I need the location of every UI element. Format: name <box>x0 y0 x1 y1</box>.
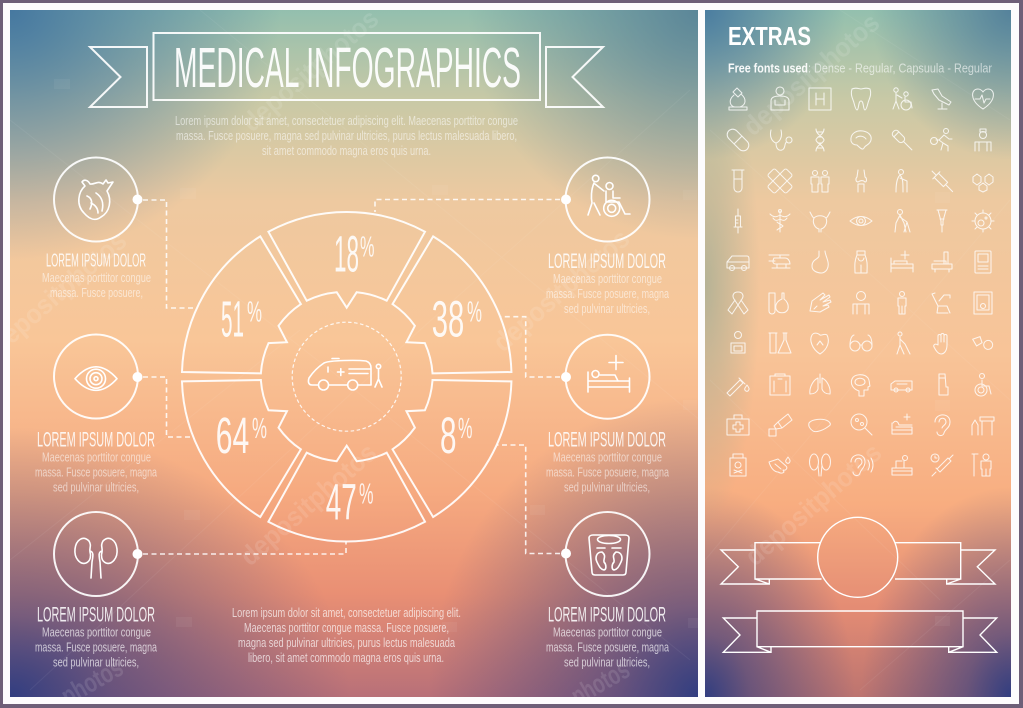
intro text: massa. Fusce posuere, magna sed pulvinar ultricies, purus lectus malesuada libero, <box>176 129 517 143</box>
description: Maecenas porttitor congue <box>42 451 151 465</box>
icon: person with chart <box>731 332 745 353</box>
icon: box <box>974 292 992 314</box>
bottom text: libero, sit amet commodo magna eros quis urna. <box>248 651 444 665</box>
description: massa. Fusce posuere, <box>50 286 143 300</box>
value 51%: 51 <box>221 291 244 348</box>
value 38%: % <box>467 297 482 329</box>
description: massa. Fusce posuere, magna <box>35 641 157 655</box>
intro text: sit amet commodo magna eros quis urna. <box>262 144 431 158</box>
description: sed pulvinar ultricies, <box>564 656 650 670</box>
icon circle <box>54 512 138 596</box>
panel: main infographic <box>10 10 698 697</box>
icon: pill <box>725 127 751 153</box>
icon: eye <box>75 367 117 390</box>
icon: bandage <box>762 163 798 199</box>
ribbon right tail <box>546 47 603 107</box>
value 8%: 8 <box>440 407 456 464</box>
icon: medical case <box>770 374 790 395</box>
icon: bathroom scale <box>589 535 629 575</box>
icon: patient on table <box>892 456 912 475</box>
icon: laboratory glassware <box>769 333 791 353</box>
title banner <box>90 33 603 107</box>
description: Maecenas porttitor congue <box>553 451 662 465</box>
panel: main infographic: depositphotos <box>234 437 382 572</box>
intro text: Lorem ipsum dolor sit amet, consectetuer adipiscing elit. Maecenas porttitor congue <box>175 114 518 128</box>
icon: person standing <box>898 292 906 314</box>
intro text <box>175 114 518 158</box>
icon circle <box>566 158 650 242</box>
ribbon body <box>755 543 961 584</box>
icon: ambulance <box>727 256 749 270</box>
panel: extras: depositphotos <box>739 437 887 572</box>
description: massa. Fusce posuere, magna <box>35 466 157 480</box>
icon: head with brain <box>851 375 870 396</box>
icon: pouring bottle <box>769 414 792 436</box>
description: Maecenas porttitor congue <box>42 626 151 640</box>
ribbon frame <box>154 33 540 100</box>
icon: liver <box>809 419 830 432</box>
icon: ear with sound <box>851 455 873 476</box>
segment 64% <box>165 343 326 527</box>
segment 51% <box>165 227 326 410</box>
icon grid <box>725 87 994 476</box>
value 47%: % <box>359 478 374 510</box>
icon: nurse figure <box>855 251 867 273</box>
label: LOREM IPSUM DOLOR <box>37 428 155 452</box>
ribbon tail left <box>723 618 771 652</box>
icon: first aid kit <box>727 415 749 435</box>
callout: heart: LOREM IPSUM DOLOR <box>46 250 146 270</box>
bottom text: magna sed pulvinar ultricies, purus lectus malesuada <box>238 636 455 650</box>
value 51%: % <box>247 297 262 329</box>
icon: anatomical heart <box>811 333 828 354</box>
icon: magnifier <box>851 414 872 435</box>
value 64%: % <box>252 413 267 445</box>
icon: nurse <box>975 129 991 151</box>
icon: wheelchair user <box>975 374 991 396</box>
panel: extras <box>705 10 1011 697</box>
ribbon tail right <box>947 550 995 584</box>
dashed hub <box>292 322 401 431</box>
icon: exam chair <box>932 293 950 313</box>
icon circle <box>566 335 650 419</box>
plain ribbon template <box>723 611 997 652</box>
value 47%: 47 <box>326 473 357 530</box>
bottom text: Maecenas porttitor congue massa. Fusce posuere, <box>244 621 449 635</box>
icon: syringe diagonal <box>929 168 956 195</box>
panel: main infographic: depositphotos <box>487 223 635 358</box>
icon: monitor card <box>975 251 991 273</box>
icon: ambulance with paramedic <box>308 358 382 390</box>
ribbon left tail <box>90 47 147 107</box>
value 18%: 18 <box>334 226 359 283</box>
segment 47% <box>268 446 425 541</box>
icon: knee joint <box>856 170 866 192</box>
icon circle <box>54 334 138 418</box>
icon: raised hand <box>934 334 947 354</box>
icon: examination table <box>972 417 994 435</box>
description <box>42 271 151 300</box>
icon: stethoscope <box>770 130 792 150</box>
heading: EXTRAS <box>728 21 811 51</box>
icon: doctor <box>771 87 789 110</box>
icon: helicopter <box>769 255 790 268</box>
icon: foot <box>939 374 948 395</box>
bottom text: Lorem ipsum dolor sit amet, consectetuer adipiscing elit. <box>232 606 461 620</box>
segment 38% <box>367 227 529 410</box>
icon: tube and flask <box>769 293 788 314</box>
value 64%: 64 <box>216 407 249 464</box>
segment 8% <box>367 343 529 527</box>
icon: hand with drop <box>769 457 790 473</box>
icon circle <box>566 512 650 596</box>
icon: kidneys <box>75 538 117 578</box>
description: sed pulvinar ultricies, <box>564 481 650 495</box>
bottom text <box>232 606 461 665</box>
icon: dental chair <box>932 89 951 109</box>
icon: bed and plus <box>588 356 630 392</box>
icon: blood tube and drop <box>727 378 749 396</box>
description <box>546 626 669 670</box>
round ribbon template <box>721 517 995 597</box>
icon: poison bottle <box>730 454 746 476</box>
icon: two people <box>811 170 829 192</box>
value 18%: % <box>360 232 374 264</box>
ribbon tail left <box>721 550 769 584</box>
description <box>35 626 157 670</box>
icon: caduceus <box>770 210 790 232</box>
fonts note: Free fonts used <box>728 60 808 76</box>
icon: awareness ribbon <box>728 292 748 314</box>
icon: syringe with clock <box>931 454 953 476</box>
icon: old man with cane <box>896 170 907 192</box>
description: sed pulvinar ultricies, <box>53 656 139 670</box>
icon: hand <box>810 293 831 312</box>
donut chart <box>165 212 529 541</box>
icon: patient in bed <box>892 414 912 434</box>
ribbon body <box>757 611 963 652</box>
icon: lungs <box>810 374 830 394</box>
icon: patient bust <box>853 292 869 314</box>
icon: microscope <box>729 88 747 110</box>
icon: heart <box>79 180 113 219</box>
description <box>546 272 669 316</box>
badge circle <box>818 517 898 597</box>
callout: heart <box>42 158 151 300</box>
label: LOREM IPSUM DOLOR <box>37 603 155 627</box>
icon: running man <box>930 128 952 151</box>
icon circle <box>54 158 138 242</box>
icon: glasses <box>850 335 872 351</box>
icon: heart pulse <box>973 89 993 109</box>
description: Maecenas porttitor congue <box>42 271 151 285</box>
icon: wheelchair <box>588 175 630 216</box>
fonts note <box>728 60 993 76</box>
description: Maecenas porttitor congue <box>553 272 662 286</box>
callout: wheelchair <box>546 158 669 316</box>
description: sed pulvinar ultricies, <box>564 302 650 316</box>
description: Maecenas porttitor congue <box>553 626 662 640</box>
connector lines <box>143 200 560 554</box>
callout: hospital bed <box>546 335 669 495</box>
value 8%: % <box>458 413 472 445</box>
icon: bed with plus <box>891 251 913 272</box>
icon: bladder <box>810 212 830 232</box>
callout: scale <box>546 512 669 670</box>
icon: hospital sign <box>809 88 831 110</box>
icon: tooth <box>851 88 871 110</box>
icon: blind man <box>897 332 910 354</box>
icon: molecules <box>973 174 993 192</box>
icon: bacterium <box>972 210 994 232</box>
ribbon tail right <box>949 618 997 652</box>
value 38%: 38 <box>432 291 464 348</box>
icon: test tube <box>732 170 744 192</box>
callout: eye <box>35 334 157 495</box>
icon: caregiver with wheelchair <box>893 88 912 110</box>
callout: kidneys <box>35 512 157 670</box>
icon: small ambulance <box>891 381 912 392</box>
icon: DNA <box>816 129 824 151</box>
icon: stomach <box>812 251 828 273</box>
description <box>546 451 669 495</box>
icon: patient scan <box>932 252 952 272</box>
icon: thermometer <box>891 129 914 152</box>
icon: kidneys <box>810 454 830 476</box>
icon: brain <box>851 131 871 149</box>
icon: ear <box>935 415 950 436</box>
icon: eye <box>850 216 872 226</box>
icon: crutch <box>937 210 947 232</box>
segment 18% <box>268 212 425 308</box>
description <box>35 451 157 495</box>
description: sed pulvinar ultricies, <box>53 481 139 495</box>
icon: person with IV <box>972 454 991 476</box>
icon: syringe vertical <box>734 209 742 233</box>
icon: pills <box>971 335 994 351</box>
icon: person with walker <box>895 210 910 232</box>
